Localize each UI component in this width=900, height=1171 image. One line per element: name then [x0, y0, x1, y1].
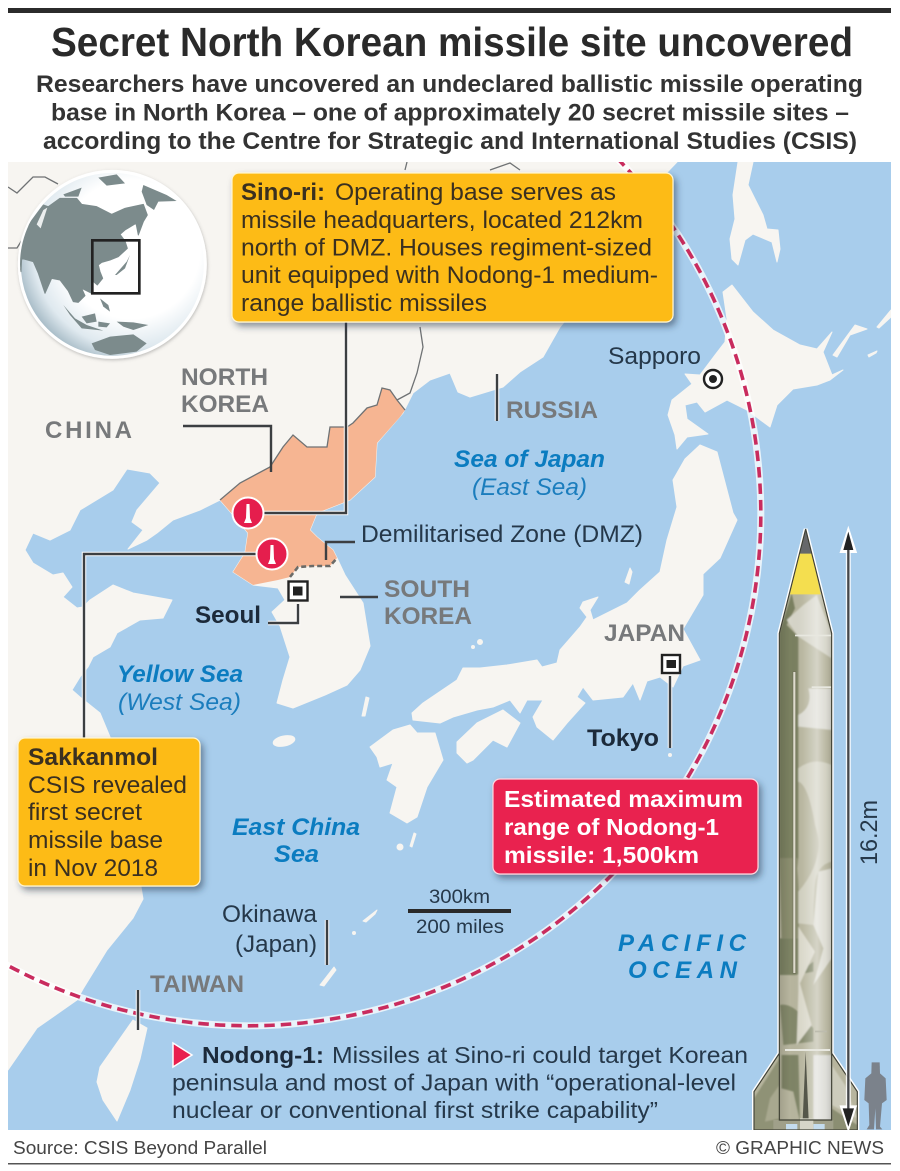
land: Kuril islands — [833, 310, 891, 357]
label: South Korea: KOREA — [384, 603, 472, 630]
icon: Seoul marker — [288, 582, 308, 600]
label: East China Sea: East China — [232, 814, 360, 841]
label: Okinawa — [222, 901, 327, 965]
label: North Korea: KOREA — [181, 391, 269, 418]
label: Seoul — [196, 604, 300, 626]
label: Pacific Ocean: PACIFIC — [618, 930, 747, 957]
international borders — [8, 162, 520, 500]
land: small islands — [272, 568, 672, 986]
subtitle — [36, 71, 863, 155]
callout: missile range: missile: 1,500km — [504, 842, 699, 868]
callout: Sino-ri: Operating base serves as — [335, 179, 616, 206]
land: Kyushu — [370, 725, 443, 823]
label: North Korea: NORTH — [181, 364, 268, 391]
label: Sapporo: Sapporo — [608, 343, 701, 370]
text block: Nodong-1 note: nuclear or conventional first strike capability” — [172, 1097, 658, 1123]
land: Taiwan — [97, 1020, 147, 1121]
label: Tokyo — [587, 676, 670, 752]
scale bar — [408, 889, 511, 933]
callout: Sino-ri: Sino-ri: — [241, 179, 325, 206]
land: Hokkaido — [668, 285, 843, 449]
label: Japan: JAPAN — [604, 620, 685, 647]
DMZ dashed line — [290, 558, 337, 577]
icon: Sino-ri missile marker — [232, 498, 264, 528]
label: DMZ: Demilitarised Zone (DMZ) — [361, 521, 643, 548]
copyright credit: © GRAPHIC NEWS — [716, 1138, 884, 1158]
leader line: Sakkanmol — [84, 554, 258, 740]
label: South Korea: SOUTH — [384, 576, 470, 603]
scale bar: 300km — [429, 887, 490, 908]
scale bar: 200 miles — [416, 917, 504, 938]
callout: Sakkanmol: in Nov 2018 — [28, 855, 158, 882]
source credit: Source: CSIS Beyond Parallel — [13, 1138, 267, 1158]
land: Asian mainland and Korean peninsula — [8, 162, 677, 1070]
label: Russia — [497, 374, 598, 424]
label: China: CHINA — [45, 417, 132, 444]
text block: Nodong-1 note: Nodong-1: — [202, 1042, 324, 1068]
callout: Sakkanmol: CSIS revealed — [28, 772, 187, 799]
label: Sea of Japan — [454, 446, 605, 501]
callout: Sino-ri: north of DMZ. Houses regiment-sized — [241, 234, 652, 262]
icon: red pointer — [173, 1043, 192, 1067]
label: Pacific Ocean — [618, 934, 746, 978]
height arrow — [841, 530, 855, 1128]
label: Seoul: Seoul — [195, 602, 261, 629]
subtitle: Researchers have uncovered an undeclared ballistic missile operating — [36, 71, 863, 98]
land: North Korea highlighted — [220, 388, 405, 585]
globe locator — [17, 171, 205, 357]
callout: Sino-ri: missile headquarters, located 212km — [241, 207, 643, 234]
height label: 16.2m — [856, 800, 883, 865]
callout: Sakkanmol: first secret — [28, 799, 142, 826]
label: Sea of Japan: (East Sea) — [472, 474, 587, 501]
land: Honshu — [412, 445, 737, 740]
label: East China Sea — [232, 818, 360, 862]
label: DMZ — [326, 521, 643, 560]
land: Shikoku — [457, 710, 520, 763]
subtitle: base in North Korea – one of approximately 20 secret missile sites – — [51, 100, 849, 126]
callout: Sino-ri: range ballistic missiles — [241, 290, 487, 317]
land: Sakhalin — [730, 162, 780, 265]
label: North Korea — [181, 364, 271, 472]
callout: Sakkanmol: missile base — [28, 827, 163, 854]
text block: Nodong-1 note: peninsula and most of Japan with “operational-level — [172, 1070, 736, 1096]
label: Okinawa: Okinawa — [222, 901, 318, 928]
callout: missile range: Estimated maximum — [504, 786, 743, 812]
label: Sea of Japan: Sea of Japan — [454, 446, 605, 473]
bottom rule — [8, 1163, 891, 1164]
icon: Tokyo marker — [662, 655, 680, 673]
callout: Sino-ri — [232, 173, 673, 322]
top rule — [8, 8, 891, 13]
text block: Nodong-1 note — [172, 1042, 748, 1123]
icon: Sakkanmol missile marker — [256, 538, 288, 570]
text block: Nodong-1 note: Missiles at Sino-ri could target Korean — [332, 1042, 748, 1068]
missile range arc — [5, 158, 761, 1026]
label: Taiwan — [138, 971, 244, 1030]
icon: Sapporo marker — [704, 370, 722, 388]
label: Pacific Ocean: OCEAN — [628, 957, 738, 984]
label: Yellow Sea: Yellow Sea — [117, 661, 243, 688]
icon: human scale figure — [864, 1062, 887, 1129]
subtitle: according to the Centre for Strategic and International Studies (CSIS) — [43, 128, 857, 155]
label: Russia: RUSSIA — [506, 397, 598, 424]
label: Tokyo: Tokyo — [587, 725, 659, 752]
label: East China Sea: Sea — [274, 841, 319, 868]
callout: Sakkanmol — [18, 738, 200, 886]
label: Yellow Sea — [119, 664, 242, 715]
missile illustration — [750, 525, 863, 1132]
label: Taiwan: TAIWAN — [150, 971, 244, 998]
callout: missile range: range of Nodong-1 — [504, 814, 719, 840]
title: Secret North Korean missile site uncovered — [51, 19, 853, 65]
label: South Korea — [340, 580, 472, 624]
leader line: Sino-ri — [263, 322, 346, 513]
label: Okinawa: (Japan) — [235, 931, 317, 958]
label: Yellow Sea: (West Sea) — [118, 689, 241, 716]
callout: Sino-ri: unit equipped with Nodong-1 medium- — [241, 262, 658, 289]
callout: Sakkanmol: Sakkanmol — [28, 744, 158, 771]
callout: missile range — [493, 779, 758, 874]
